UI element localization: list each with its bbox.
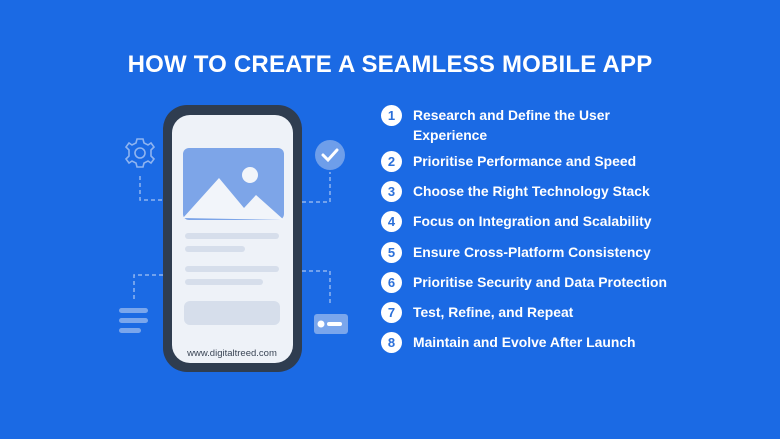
- icon: gear: [126, 139, 154, 167]
- item 3: [381, 181, 650, 202]
- item 4: [381, 211, 652, 232]
- numbered list: Prioritise Security and Data Protection: [413, 274, 667, 290]
- numbered list: 2: [388, 154, 395, 169]
- numbered list: 8: [388, 335, 395, 350]
- numbered list: Research and Define the User: [413, 107, 610, 123]
- numbered list: [381, 105, 667, 353]
- item 2: [381, 151, 636, 172]
- numbered list: Experience: [413, 127, 487, 143]
- numbered list: Choose the Right Technology Stack: [413, 183, 650, 199]
- icon: check: [315, 140, 345, 170]
- numbered list: Ensure Cross-Platform Consistency: [413, 244, 651, 260]
- title: HOW TO CREATE A SEAMLESS MOBILE APP: [128, 51, 652, 78]
- phone: [163, 105, 302, 372]
- numbered list: 4: [388, 214, 395, 229]
- phone: www.digitaltreed.com: [186, 348, 277, 359]
- icon: card: [314, 314, 348, 334]
- numbered list: Test, Refine, and Repeat: [413, 304, 573, 320]
- item 6: [381, 272, 667, 293]
- numbered list: Prioritise Performance and Speed: [413, 153, 636, 169]
- item 5: [381, 242, 651, 263]
- numbered list: 3: [388, 184, 395, 199]
- item 7: [381, 302, 574, 323]
- illustration: phone with icons: [119, 105, 348, 372]
- numbered list: 6: [388, 275, 395, 290]
- numbered list: Maintain and Evolve After Launch: [413, 334, 636, 350]
- item 1: [381, 105, 610, 143]
- icon: menu lines: [119, 308, 148, 333]
- item 8: [381, 332, 636, 353]
- numbered list: Focus on Integration and Scalability: [413, 213, 652, 229]
- numbered list: 7: [388, 305, 395, 320]
- numbered list: 1: [388, 108, 395, 123]
- numbered list: 5: [388, 245, 395, 260]
